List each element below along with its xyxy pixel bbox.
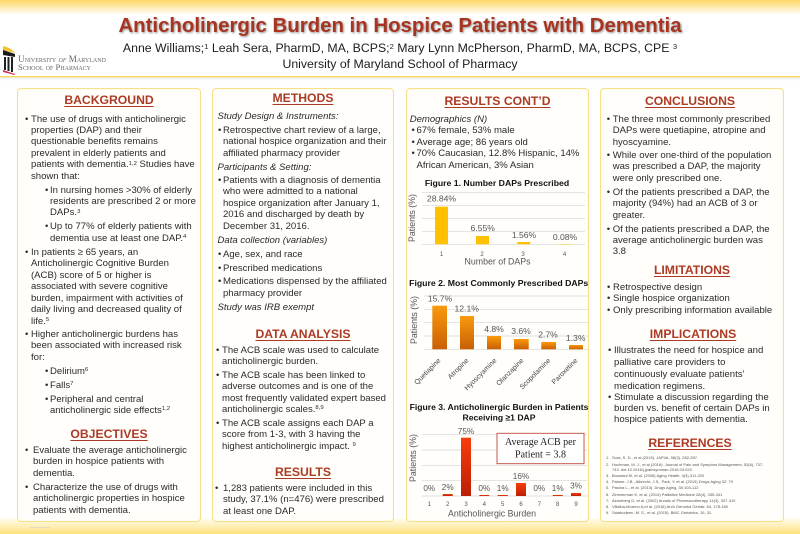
bullet: ACB score: In patients ≥ 65 years, an [31, 247, 138, 258]
subheading: data collection: Data collection (variables) [218, 234, 327, 246]
implication 1 [608, 345, 763, 392]
bullet: ACB validated: anticholinergic scales.8,9 [222, 404, 324, 415]
panel: methods, data analysis, results: • [218, 262, 221, 274]
heading: limitations: LIMITATIONS [654, 263, 730, 277]
panel: background and objectives: • [25, 247, 28, 258]
panel: methods, data analysis, results: • [218, 249, 221, 260]
bullet: dispensed: pharmacy provider [223, 288, 302, 298]
chart: figure 3 anticholinergic burden: 0% [423, 484, 435, 493]
reference list: Hochman, M. J., et al (2016). Journal of Pain and Symptom Management, 52(6), 737- [612, 462, 763, 467]
sub-bullet: 77 percent: Up to 77% of elderly patients with [50, 221, 192, 232]
chart: figure 1 number of DAPs prescribed: Figure 1. Number DAPs Prescribed [425, 178, 569, 188]
reference list: Salahudeen, M. S., et al. (2015). BMC Geriatrics, 15, 31. [612, 510, 712, 515]
bullet: 1,283 patients: study, 37.1% (n=476) were prescribed [223, 494, 384, 505]
subheading: participants: Participants & Setting: [218, 162, 311, 172]
objective 2: patients with dementia. [33, 504, 131, 516]
limitation: prescribing: Only prescribing information available [613, 304, 772, 316]
bullet: ACB scale used: The ACB scale was used to calculate [222, 344, 379, 356]
sub-bullet: falls: Falls7 [50, 380, 73, 390]
objective 1 [25, 445, 187, 479]
bullet: 1,283 patients: 1,283 patients were included in this [223, 482, 372, 494]
conclusion 4: 3.8 [613, 246, 626, 257]
chart: figure 2 most commonly prescribed DAPs: 2.7% [538, 330, 558, 340]
conclusion 2: was prescribed a DAP, the majority [613, 161, 761, 172]
logo wordmark: University of Maryland [18, 54, 106, 64]
chart: figure 3 anticholinergic burden: Patients (%) [408, 434, 418, 482]
panel: background and objectives: • [25, 482, 28, 492]
implication 1: palliative care providers to [614, 357, 725, 368]
bullet: patients: Patients with a diagnosis of dementia [223, 175, 381, 186]
chart: figure 1 number of DAPs prescribed: 1.56% [512, 230, 537, 240]
reference list [606, 454, 764, 515]
chart: figure 3 anticholinergic burden: 8 [556, 502, 560, 508]
chart: figure 1 number of DAPs prescribed: 28.84% [427, 194, 456, 204]
panel: background and objectives: • [45, 221, 48, 232]
implication 2: hospice patients with dementia. [614, 414, 748, 425]
heading: data analysis: DATA ANALYSIS [255, 327, 351, 341]
panel: methods, data analysis, results [212, 88, 394, 522]
chart: figure 1 number of DAPs prescribed: 4 [563, 252, 567, 258]
panel: methods, data analysis, results: • [216, 418, 219, 428]
reference list: Pasina L., et al. (2013). Drugs Aging, 30:103-112 [612, 485, 698, 490]
panel: background and objectives: • [25, 445, 28, 456]
implication 2: burden vs. benefit of certain DAPs in [614, 403, 770, 414]
bullet: age: Age, sex, and race [223, 249, 303, 260]
chart: figure 2 most commonly prescribed DAPs: Quetiapine [414, 357, 442, 386]
reference list: Palmer, J.B., Albrecht, J.S., Park, Y. et al. (2015) Drugs Aging 32: 79 [612, 479, 733, 484]
panel: conclusions, limitations, implications, references: • [607, 187, 610, 198]
objective 1: dementia. [33, 468, 75, 479]
note: IRB exempt: Study was IRB exempt [218, 302, 314, 312]
panel: methods, data analysis, results: • [218, 276, 221, 286]
bullet: ACB scoring [216, 418, 374, 452]
subheading: demographics: Demographics (N) [410, 114, 487, 124]
authors: Anne Williams;1 Leah Sera, PharmD, MA, BCPS;2 Mary Lynn McPherson, PharmD, MA, BCPS, CPE 3 [123, 41, 677, 55]
bullet: patients: who were admitted to a national [223, 186, 358, 197]
bullet: medications: Prescribed medications [223, 262, 322, 274]
panel: conclusions, limitations, implications, references: • [608, 392, 611, 402]
conclusion 3: greater. [613, 210, 645, 221]
bullet: chart review: Retrospective chart review of a large, [223, 125, 381, 136]
sub-bullet: nursing homes [45, 185, 196, 218]
bullet: chart review [218, 125, 386, 159]
conclusion 4: Of the patients prescribed a DAP, the [613, 224, 770, 234]
bullet: ACB validated: adverse outcomes and is one of the [222, 381, 373, 392]
chart: figure 2 most commonly prescribed DAPs: Hyoscyamine [464, 357, 498, 392]
chart: figure 3 anticholinergic burden: 9 [574, 502, 578, 508]
conclusion 2: were only prescribed one. [613, 173, 722, 184]
chart: figure 2 most commonly prescribed DAPs: 4.8% [484, 324, 504, 334]
reference list: Boustani M, et al. (2008) Aging Health. 4(3),311-320 [612, 473, 704, 478]
panel: conclusions, limitations, implications, references: • [607, 114, 610, 124]
panel: conclusions, limitations, implications, references: • [607, 292, 610, 304]
chart: figure 3 anticholinergic burden: Figure 3. Anticholinergic Burden in Patients [410, 402, 589, 412]
panel: conclusions, limitations, implications, references: • [607, 224, 610, 234]
reference list: 6. [606, 492, 609, 496]
bullet: race: 70% Caucasian, 12.8% Hispanic, 14% [416, 148, 579, 159]
chart: figure 3 anticholinergic burden: 16% [513, 472, 529, 481]
chart: figure 3 anticholinergic burden: 0% [533, 484, 545, 493]
chart: figure 3 anticholinergic burden: 7 [538, 502, 542, 508]
heading: methods: METHODS [273, 91, 333, 105]
chart: figure 2 most commonly prescribed DAPs: 1.3% [566, 333, 586, 343]
sub-bullet: delirium: Delirium6 [50, 366, 88, 377]
bullet: ACB scoring: highest anticholinergic impact. 9 [222, 441, 356, 452]
chart: figure 2 most commonly prescribed DAPs: Paroxetine [551, 357, 579, 386]
panel: background and objectives: • [45, 394, 48, 405]
reference list: Sura, S. D., et al (2015). JAPhA, 58(3), 282-287. [612, 454, 698, 460]
sub-bullet: nursing homes: residents are prescribed 2 or more [50, 196, 196, 207]
implication 1: Illustrates the need for hospice and [614, 345, 763, 356]
bottom gradient band [0, 518, 800, 534]
conclusion 3: majority (94%) had an ACB of 3 or [613, 198, 758, 209]
chart: figure 2 most commonly prescribed DAPs: Patients (%) [409, 296, 419, 344]
heading: references: REFERENCES [648, 436, 732, 450]
bullet: ACB validated: most frequently validated expert based [222, 392, 386, 404]
sub-bullet: 77 percent: dementia use at least one DAP.4 [50, 232, 186, 244]
heading: objectives: OBJECTIVES [70, 427, 148, 441]
sub-bullet: 77 percent [45, 221, 192, 244]
chart: figure 3 anticholinergic burden: Anticholinergic Burden [448, 508, 536, 518]
panel: background and objectives: • [25, 329, 28, 340]
bullet: patients: 2016 and discharged by death by [223, 209, 364, 220]
reference list: 743. doi:10.1016/j.jpainsymman.2016.03.020 [612, 467, 692, 472]
bullet: DAP prevalence: The use of drugs with anticholinergic [31, 114, 186, 125]
bullet: race: African American, 3% Asian [416, 160, 534, 170]
sub-bullet: nursing homes: DAPs.3 [50, 207, 80, 218]
logo: University of Maryland School of Pharmacy [3, 46, 106, 75]
reference list: Zimmerman K, et al. (2014) Palliative Medicine 28(4), 335-341 [612, 492, 722, 496]
chart: figure 3 anticholinergic burden: 2% [442, 483, 454, 492]
chart: figure 3 anticholinergic burden: 1 [428, 502, 432, 508]
objective 1: Evaluate the average anticholinergic [33, 445, 187, 456]
heading: results cont'd: RESULTS CONT’D [444, 94, 551, 108]
bullet: DAP prevalence: shown that: [31, 171, 80, 182]
bullet: ACB scale used: anticholinergic burden. [222, 356, 318, 367]
reference list: 1. [606, 454, 609, 460]
callout: average ACB: Patient = 3.8 [515, 449, 566, 460]
implication 1: continuously evaluate patients’ [614, 369, 745, 380]
chart: figure 2 most commonly prescribed DAPs: Atropine [447, 357, 470, 381]
panel: conclusions, limitations, implications, references: • [607, 282, 610, 292]
callout: average ACB: Average ACB per [505, 437, 577, 448]
bullet: DAP prevalence: patients with dementia.1,2 Studies have [31, 159, 195, 170]
bullet: ACB score: associated with severe cognitive [31, 281, 168, 292]
limitation: organization: Single hospice organization [613, 292, 730, 304]
bullet: age: Average age; 86 years old [416, 136, 528, 148]
affiliation: University of Maryland School of Pharmacy [282, 57, 518, 71]
sub-bullet: side effects: anticholinergic side effects1,2 [50, 405, 170, 416]
bullet: ACB validated [216, 370, 386, 415]
heading: implications: IMPLICATIONS [650, 327, 736, 341]
chart: figure 3 anticholinergic burden: 1% [497, 484, 509, 493]
implication 1: medication regimens. [614, 380, 705, 392]
reference list: 5. [606, 485, 609, 490]
title: Anticholinergic Burden in Hospice Patients with Dementia [118, 15, 682, 37]
chart: figure 1 number of DAPs prescribed: 6.55% [471, 223, 495, 233]
chart: figure 3 anticholinergic burden: 3 [464, 502, 468, 508]
panel: conclusions, limitations, implications, references: • [607, 304, 610, 316]
reference list: Azamberg D, et al. (2002) Annals of Pharmacotherapy 14(3), 307-310 [612, 498, 735, 502]
implication 2 [608, 392, 770, 425]
chart: figure 3 anticholinergic burden: 5 [501, 502, 505, 508]
conclusion 4: average anticholinergic burden was [613, 235, 763, 246]
bullet: ACB score: life.5 [31, 316, 49, 327]
bullet: patients: hospice organization after January 1, [223, 198, 380, 209]
bullet: increased risk: been associated with increased risk [31, 340, 182, 351]
reference list: 9. [606, 510, 609, 515]
conclusion 2 [607, 150, 771, 184]
panel: results continued: • [412, 136, 415, 148]
conclusion 3: Of the patients prescribed a DAP, the [613, 187, 770, 198]
conclusion 1: hyoscyamine. [613, 136, 671, 148]
chart: figure 2 most commonly prescribed DAPs: 3.6% [511, 326, 531, 336]
bullet: ACB score: (ACB) score of 5 or higher is [31, 270, 151, 281]
panel: background and objectives: • [25, 114, 28, 125]
chart: figure 2 most commonly prescribed DAPs: Figure 2. Most Commonly Prescribed DAPs [409, 278, 588, 288]
objective 1: burden in hospice patients with [33, 456, 164, 467]
chart: figure 3 anticholinergic burden: 2 [446, 502, 450, 508]
bullet: ACB score: Anticholinergic Cognitive Burden [31, 258, 169, 269]
panel: conclusions, limitations, implications, references [600, 88, 784, 522]
chart: figure 2 most commonly prescribed DAPs: Scopolamine [519, 357, 552, 391]
chart: figure 3 anticholinergic burden [408, 402, 589, 518]
decorative faint line, bottom left [30, 527, 50, 528]
chart: figure 3 anticholinergic burden: Receiving ≥1 DAP [462, 412, 536, 422]
chart: figure 2 most commonly prescribed DAPs: 15.7% [428, 294, 453, 304]
heading: conclusions: CONCLUSIONS [645, 94, 735, 108]
bullet: dispensed [218, 276, 387, 298]
conclusion 1: DAPs were quetiapine, atropine and [613, 125, 766, 136]
bullet: DAP prevalence: questionable benefits remains [31, 136, 158, 147]
panel: methods, data analysis, results: • [216, 344, 219, 356]
heading: results: RESULTS [275, 465, 331, 479]
bullet: ACB scoring: The ACB scale assigns each DAP a [222, 418, 374, 428]
logo wordmark [18, 54, 106, 72]
top gradient band [0, 0, 800, 15]
chart: figure 3 anticholinergic burden: 3% [570, 482, 582, 491]
bullet: DAP prevalence [25, 114, 195, 182]
bullet: ACB score: daily living and decreased quality of [31, 304, 182, 315]
callout: average ACB [497, 433, 584, 464]
bullet: increased risk: Higher anticholinergic burdens has [31, 329, 178, 340]
limitation: design: Retrospective design [613, 282, 702, 292]
bullet: increased risk: for: [31, 352, 45, 363]
chart: figure 3 anticholinergic burden: 4 [483, 502, 487, 508]
panel: conclusions, limitations, implications, references: • [607, 150, 610, 161]
sub-bullet: side effects: Peripheral and central [50, 394, 143, 405]
chart: figure 1 number of DAPs prescribed: 1 [440, 252, 444, 258]
bullet: 1,283 patients [215, 482, 384, 516]
bullet: DAP prevalence: properties (DAP) and their [31, 125, 142, 136]
chart: figure 3 anticholinergic burden: 1% [552, 484, 564, 493]
panel: methods, data analysis, results: • [216, 370, 219, 380]
bullet: ACB scale used [216, 344, 379, 367]
bullet: race [412, 148, 579, 170]
chart: figure 2 most commonly prescribed DAPs: Olanzapine [495, 357, 525, 387]
panel: results continued [406, 88, 589, 522]
chart: figure 3 anticholinergic burden: 0% [478, 484, 490, 493]
panel: methods, data analysis, results: • [218, 175, 221, 186]
panel: methods, data analysis, results: • [215, 482, 218, 494]
conclusion 4 [607, 224, 770, 257]
bullet: ACB score [25, 247, 183, 327]
icon: dome and columns [3, 46, 15, 75]
chart: figure 1 number of DAPs prescribed: 0.08% [553, 232, 578, 242]
objective 2 [25, 482, 185, 516]
chart: figure 3 anticholinergic burden: 6 [519, 502, 523, 508]
chart: figure 2 most commonly prescribed DAPs: 12.1% [455, 304, 479, 314]
panel: conclusions, limitations, implications, references: • [608, 345, 611, 356]
reference list: 4. [606, 479, 609, 484]
reference list: 8. [606, 504, 609, 509]
reference list: 3. [606, 473, 609, 478]
logo wordmark: School of Pharmacy [18, 62, 91, 72]
reference list: 2. [606, 462, 609, 467]
panel: results continued: • [412, 125, 415, 136]
panel: background and objectives: • [45, 185, 48, 196]
conclusion 3 [607, 187, 770, 221]
bullet: ACB validated: The ACB scale has been linked to [222, 370, 365, 380]
subheading: study design: Study Design & Instruments: [218, 111, 338, 122]
bullet: chart review: national hospice organization and their [223, 136, 386, 147]
objective 2: Characterize the use of drugs with [33, 482, 178, 492]
heading: background: BACKGROUND [64, 93, 154, 107]
header rule [0, 76, 800, 81]
chart: figure 2 most commonly prescribed DAPs [409, 278, 588, 392]
conclusion 1 [607, 114, 770, 148]
bullet: 1,283 patients: at least one DAP. [223, 506, 296, 516]
sub-bullet: side effects [45, 394, 170, 416]
panel: background and objectives: • [45, 366, 48, 377]
implication 2: Stimulate a discussion regarding the [614, 392, 769, 402]
chart: figure 1 number of DAPs prescribed [407, 178, 585, 266]
panel: results continued: • [412, 148, 415, 159]
bullet: increased risk [25, 329, 182, 363]
reference list: Villalba-Moreno A,et al. (2016) Arch Gerontol Geriatr. 64, 178-180 [612, 504, 728, 509]
bullet: ACB scoring: score from 1-3, with 3 having the [222, 429, 360, 440]
chart: figure 1 number of DAPs prescribed: Number of DAPs [464, 256, 531, 266]
panel: background and objectives: • [45, 380, 48, 390]
bullet: patients [218, 175, 381, 232]
chart: figure 1 number of DAPs prescribed: 2 [480, 252, 484, 258]
chart: figure 1 number of DAPs prescribed: 3 [521, 252, 525, 258]
bullet: ACB score: burden, impairment with activities of [31, 293, 183, 304]
bullet: dispensed: Medications dispensed by the affiliated [223, 276, 387, 286]
reference list: 7. [606, 498, 609, 502]
conclusion 1: The three most commonly prescribed [613, 114, 770, 124]
chart: figure 3 anticholinergic burden: 75% [458, 427, 474, 436]
objective 2: anticholinergic properties in hospice [33, 493, 185, 504]
bullet: patients: December 31, 2016. [223, 221, 310, 232]
panel: methods, data analysis, results: • [218, 125, 221, 136]
bullet: chart review: affiliated pharmacy provider [223, 148, 340, 159]
sub-bullet: nursing homes: In nursing homes >30% of elderly [50, 185, 192, 196]
conclusion 2: While over one-third of the population [613, 150, 771, 161]
bullet: DAP prevalence: prevalent in elderly patients and [31, 148, 166, 159]
panel: background and objectives [17, 88, 201, 522]
chart: figure 1 number of DAPs prescribed: Patients (%) [407, 194, 417, 242]
bullet: sex: 67% female, 53% male [416, 125, 515, 136]
